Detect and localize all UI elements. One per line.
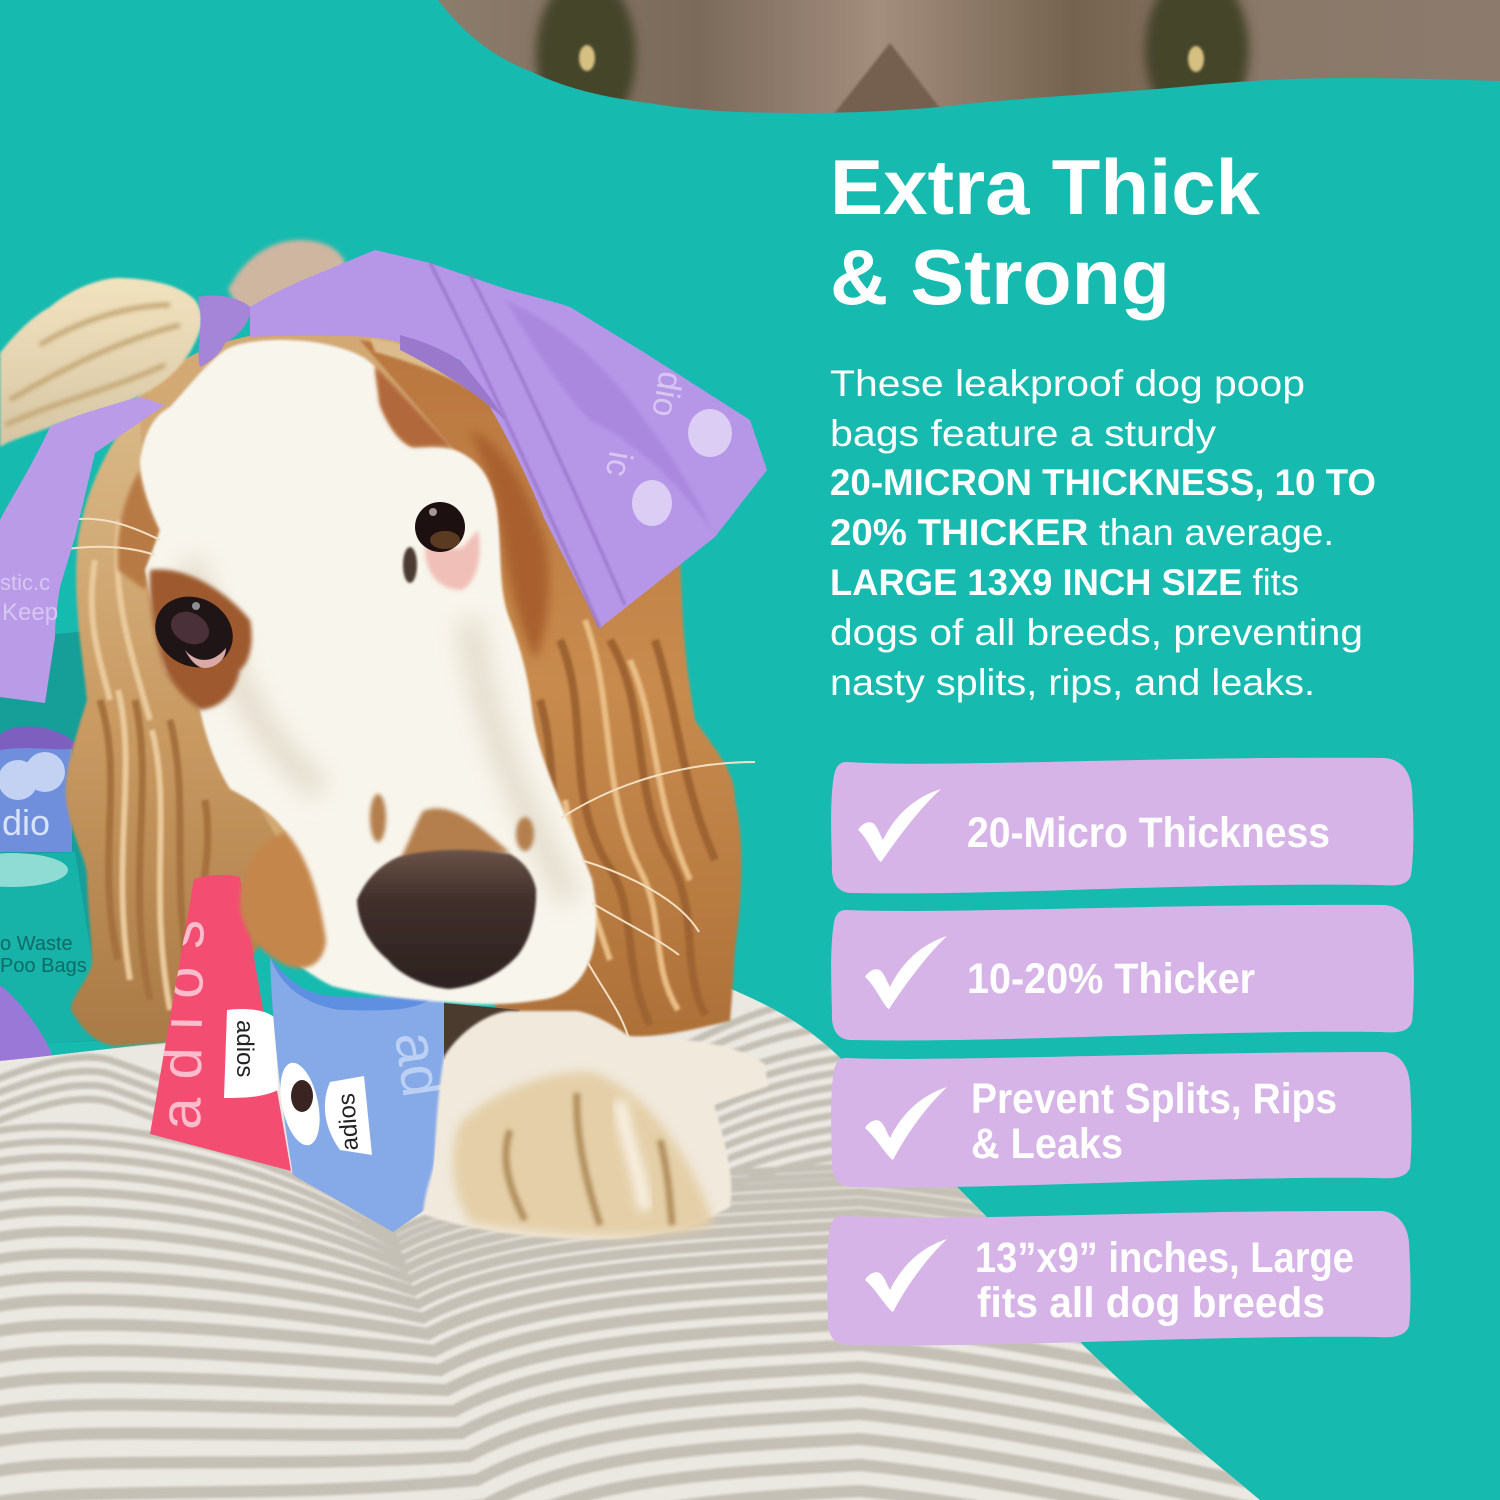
blue poop bag roll: ad bbox=[382, 1028, 455, 1101]
top wave photo of room bbox=[438, 0, 1500, 113]
head fur underlay bbox=[120, 325, 540, 900]
whiskers bbox=[60, 519, 755, 1036]
product box and rolls behind dog: o Waste bbox=[0, 933, 73, 955]
right bow wing bbox=[250, 250, 767, 628]
dog bbox=[60, 325, 755, 1232]
feature card: 13x9 inches: fits all dog breeds bbox=[977, 1279, 1325, 1327]
feature card: 13x9 inches: 13”x9” inches, Large bbox=[975, 1234, 1354, 1282]
feature card: 13x9 inches bbox=[827, 1211, 1410, 1345]
body text: These leakproof dog poop bbox=[830, 363, 1305, 404]
check icon bbox=[858, 789, 941, 862]
heading bbox=[830, 143, 1261, 321]
right ear fur bbox=[360, 338, 741, 1040]
body text: LARGE 13X9 INCH SIZE fits bbox=[830, 562, 1299, 603]
brown patch around left eye bbox=[150, 569, 252, 710]
blond topknot bbox=[0, 278, 202, 447]
blue poop bag roll: adios bbox=[333, 1092, 364, 1151]
body text bbox=[830, 363, 1376, 703]
white face bbox=[140, 340, 596, 1004]
check icon bbox=[865, 936, 947, 1009]
brown patch top of head bbox=[375, 367, 452, 447]
feature card: Prevent Splits, Rips & Leaks bbox=[831, 1052, 1412, 1187]
heading: Extra Thick bbox=[830, 143, 1261, 231]
purple bag bow: ic bbox=[598, 449, 640, 479]
face shading bbox=[190, 560, 570, 900]
arm and paw bbox=[423, 1003, 768, 1239]
feature card: 20-Micro Thickness bbox=[831, 758, 1413, 893]
heading: & Strong bbox=[830, 233, 1170, 321]
body text: bags feature a sturdy bbox=[830, 413, 1217, 454]
right eye bbox=[403, 502, 480, 590]
left bow tail bbox=[0, 397, 165, 703]
body text: 20-MICRON THICKNESS, 10 TO bbox=[830, 462, 1376, 503]
tuft behind head bbox=[228, 240, 345, 310]
check icon bbox=[865, 1239, 947, 1312]
body text: 20% THICKER than average. bbox=[830, 512, 1334, 553]
nose bbox=[357, 850, 536, 989]
pink poop bag roll: adios bbox=[148, 919, 217, 1130]
feature card: 10-20% Thicker bbox=[831, 905, 1414, 1040]
product box and rolls behind dog: Poo Bags bbox=[0, 955, 87, 977]
brown muzzle side bbox=[240, 832, 326, 968]
left eye bbox=[143, 583, 245, 681]
pink poop bag roll: adios bbox=[231, 1020, 258, 1077]
purple bag bow bbox=[0, 250, 767, 703]
check icon bbox=[865, 1087, 947, 1160]
cushion with stripes bbox=[0, 980, 1280, 1500]
feature card: Prevent Splits, Rips & Leaks: & Leaks bbox=[971, 1120, 1123, 1168]
purple bag bow: Keep bbox=[2, 599, 58, 626]
body text: dogs of all breeds, preventing bbox=[830, 612, 1363, 653]
left ear fur bbox=[66, 405, 300, 1046]
feature card: Prevent Splits, Rips & Leaks: Prevent Splits, Rips bbox=[971, 1075, 1337, 1123]
blue poop bag roll bbox=[270, 957, 455, 1232]
feature card: 10-20% Thicker: 10-20% Thicker bbox=[967, 955, 1255, 1003]
feature card: 20-Micro Thickness: 20-Micro Thickness bbox=[967, 809, 1330, 857]
bow knot bbox=[198, 295, 250, 367]
purple bag bow: dio bbox=[644, 369, 690, 420]
body text: nasty splits, rips, and leaks. bbox=[830, 662, 1315, 703]
muzzle freckles bbox=[370, 794, 534, 860]
pink poop bag roll bbox=[148, 875, 291, 1171]
purple bag bow: stic.c bbox=[0, 570, 50, 595]
product box and rolls behind dog: dio bbox=[2, 802, 50, 843]
product box and rolls behind dog bbox=[0, 630, 120, 1065]
